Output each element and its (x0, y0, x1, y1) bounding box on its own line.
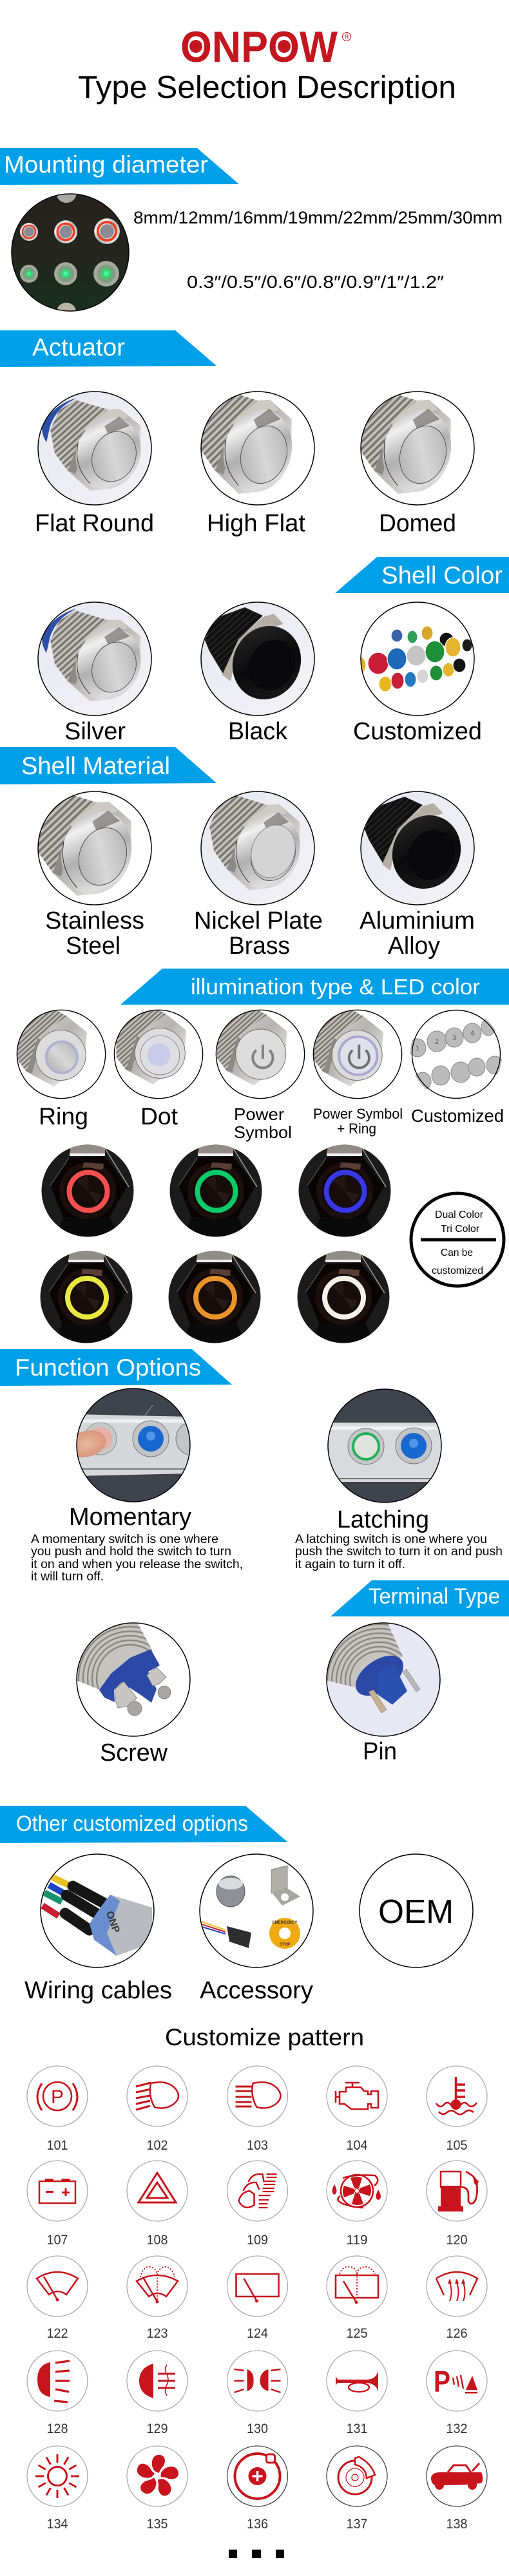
icon: 101 parking brake: 101 (46, 2138, 68, 2153)
photo: customized illumination symbols: 2 (435, 1038, 439, 1046)
photo: customized illumination symbols: 3 (452, 1034, 456, 1042)
icon: 122 wiper (27, 2256, 88, 2341)
photo: blue LED (299, 1145, 390, 1236)
photo: white LED (298, 1251, 389, 1343)
label: black: Black (228, 718, 288, 745)
label: power symbol: Symbol (234, 1122, 292, 1142)
label: power symbol plus ring (313, 1106, 403, 1137)
photo: lit switches of several diameters (11, 193, 130, 312)
photo: pin terminal (323, 1620, 440, 1738)
photo: momentary press (76, 1388, 191, 1502)
photo: customized illumination symbols: 4 (470, 1030, 474, 1037)
label: power symbol (234, 1104, 292, 1142)
photo: customized illumination symbols: 1 (416, 1045, 419, 1052)
icon: 130 front rear fog: 130 (247, 2421, 268, 2436)
label: stainless steel: Steel (66, 933, 120, 960)
icon: 136 brake pad: 136 (247, 2517, 268, 2532)
icon: 109 multi lamp (227, 2161, 287, 2248)
icon: 132 parking sensor: P (434, 2365, 450, 2398)
icon: 108 hazard triangle: 108 (147, 2233, 168, 2248)
heading: illumination type: illumination type & LED color (191, 975, 480, 999)
label: latching: Latching (337, 1506, 429, 1533)
icon: 103 low beam: 103 (247, 2138, 268, 2153)
photo: wiring cables (41, 1854, 154, 1967)
label: screw: Screw (100, 1739, 168, 1766)
text: momentary description: it on and when you release the switch, (31, 1558, 243, 1571)
icon: 104 engine (327, 2066, 387, 2153)
photo: customized colored shells (351, 602, 474, 715)
panel: illumination type and LED color (17, 969, 509, 1349)
heading: other customized options (0, 1806, 287, 1843)
icon: 109 multi lamp: 109 (247, 2233, 268, 2248)
icon: 128 headlamp (27, 2351, 88, 2436)
callout: dual and tri color: Can be (441, 1247, 473, 1258)
photo: customized illumination symbols (409, 1009, 503, 1100)
icon: 135 fan: 135 (147, 2517, 168, 2532)
icon: 101 parking brake (27, 2066, 88, 2153)
panel: terminal type (74, 1580, 509, 1766)
photo: green LED (170, 1145, 262, 1236)
photo: red LED (41, 1145, 134, 1236)
icon: 120 fuel pump (427, 2161, 487, 2248)
icon: 125 rear washer: 125 (347, 2326, 367, 2341)
icon: 123 wiper washer (127, 2256, 187, 2341)
photo: latching switches (327, 1388, 443, 1504)
panel: other customized options (0, 1806, 473, 2004)
photo: power symbol illumination (216, 1009, 305, 1099)
icon: 134 sun (27, 2446, 88, 2532)
icon: 105 coolant temperature: 105 (446, 2138, 468, 2153)
text: momentary description (31, 1533, 243, 1584)
photo: accessories (200, 1854, 313, 1967)
icon: 134 sun: 134 (46, 2517, 68, 2532)
heading: actuator: Actuator (32, 334, 125, 361)
icon: 132 parking sensor: 132 (446, 2421, 468, 2436)
callout: dual and tri color: Dual Color (435, 1209, 484, 1220)
badge: OEM (360, 1854, 473, 1967)
label: ring: Ring (39, 1103, 88, 1130)
label: domed: Domed (379, 510, 456, 537)
label: nickel plate brass: Brass (229, 933, 290, 960)
panel: pattern icon grid (27, 2066, 487, 2532)
text: momentary description: A momentary switch is one where (31, 1533, 218, 1546)
icon: 124 rear wiper (227, 2256, 287, 2341)
icon: 126 defrost (427, 2256, 487, 2341)
callout: dual and tri color (411, 1193, 504, 1286)
heading: illumination type (120, 969, 509, 1005)
heading: other customized options: Other customized options (16, 1812, 248, 1836)
label: aluminium alloy (360, 907, 475, 960)
heading: shell color: Shell Color (381, 562, 503, 589)
label: nickel plate brass (194, 907, 323, 960)
icon: 130 front rear fog (227, 2351, 287, 2436)
icon: 129 fog lamp (127, 2351, 187, 2436)
label: stainless steel (45, 907, 144, 960)
label: flat round: Flat Round (35, 510, 154, 537)
photo: screw terminal (74, 1620, 190, 1736)
icon: 105 coolant temperature (427, 2066, 487, 2153)
icon: 126 defrost: 126 (446, 2326, 468, 2341)
label: customized: Customized (353, 718, 482, 745)
photo: domed (356, 390, 474, 505)
callout: dual and tri color: customized (432, 1265, 483, 1276)
photo: high flat (197, 390, 314, 505)
icon: 120 fuel pump: 120 (446, 2233, 468, 2248)
label: pin: Pin (363, 1738, 397, 1765)
heading: actuator (0, 330, 216, 367)
icon: 124 rear wiper: 124 (247, 2326, 268, 2341)
label: high flat: High Flat (207, 510, 305, 537)
text: latching description: push the switch to turn it on and push (295, 1545, 503, 1558)
icon: 119 cooling fan: 119 (347, 2233, 367, 2248)
heading: function options (0, 1349, 232, 1386)
callout: dual and tri color: Tri Color (441, 1224, 480, 1235)
label: accessory: Accessory (200, 1977, 313, 2004)
label: nickel plate brass: Nickel Plate (194, 907, 323, 934)
icon: 123 wiper washer: 123 (147, 2326, 168, 2341)
label: aluminium alloy: Alloy (388, 933, 440, 960)
label: silver: Silver (64, 718, 126, 745)
heading: shell material: Shell Material (21, 753, 170, 780)
icon: 103 low beam (227, 2066, 287, 2153)
sizes in millimetres: 8mm/12mm/16mm/19mm/22mm/25mm/30mm (133, 208, 503, 227)
heading: shell material (0, 747, 216, 784)
icon: 137 brake disc (327, 2446, 387, 2532)
icon: 104 engine: 104 (347, 2138, 368, 2153)
heading: terminal type: Terminal Type (369, 1584, 500, 1609)
heading: shell color (335, 557, 509, 593)
icon: 135 fan (127, 2446, 187, 2532)
label: power symbol plus ring: + Ring (337, 1121, 376, 1137)
icon: 102 high beam (127, 2066, 187, 2153)
icon: 136 brake pad (227, 2446, 287, 2532)
panel: shell color (38, 557, 509, 745)
label: aluminium alloy: Aluminium (360, 907, 475, 934)
icon: 122 wiper: 122 (46, 2326, 68, 2341)
continuation dots (229, 2550, 284, 2558)
label: power symbol plus ring: Power Symbol (313, 1106, 403, 1122)
photo: dot illumination (114, 1008, 203, 1099)
photo: aluminium alloy (361, 791, 474, 905)
title: Type Selection Description (78, 70, 456, 105)
photo: ring illumination (17, 1010, 106, 1099)
heading: terminal type (331, 1580, 509, 1616)
photo: nickel plate brass (201, 791, 314, 905)
heading: function options: Function Options (15, 1354, 201, 1381)
icon: 107 battery: 107 (46, 2233, 68, 2248)
badge: OEM: OEM (378, 1893, 454, 1931)
photo: black shell (201, 602, 314, 715)
label: momentary: Momentary (69, 1504, 191, 1531)
text: momentary description: it will turn off. (31, 1570, 104, 1584)
text: latching description: A latching switch is one where you (295, 1533, 487, 1546)
photo: accessories: STOP (280, 1943, 290, 1947)
photo: silver shell (38, 602, 152, 715)
icon: 119 cooling fan (327, 2161, 387, 2248)
photo: stainless steel (34, 791, 151, 906)
label: customized: Customized (411, 1106, 504, 1126)
text: momentary description: you push and hold the switch to turn (31, 1545, 231, 1558)
text: latching description (295, 1533, 503, 1571)
icon: 128 headlamp: 128 (46, 2421, 68, 2436)
icon: 107 battery (27, 2161, 88, 2248)
icon: 125 rear washer (327, 2256, 387, 2341)
icon: 137 brake disc: 137 (347, 2517, 367, 2532)
icon: 101 parking brake: P (51, 2087, 64, 2108)
panel: function options (0, 1349, 503, 1584)
icon: 132 parking sensor (427, 2351, 487, 2436)
panel: shell material (0, 747, 475, 960)
icon: 129 fog lamp: 129 (147, 2421, 168, 2436)
photo: wiring cables: ONP (104, 1909, 122, 1935)
heading: mounting diameter (0, 148, 239, 185)
icon: 138 car trunk: 138 (446, 2517, 468, 2532)
heading: customize pattern: Customize pattern (165, 2024, 364, 2050)
logo: ONPOW: R (345, 33, 349, 40)
label: power symbol: Power (234, 1104, 284, 1124)
panel: mounting diameter (0, 148, 503, 321)
heading: mounting diameter: Mounting diameter (4, 151, 208, 178)
label: wiring cables: Wiring cables (24, 1977, 172, 2004)
photo: power symbol plus ring (313, 1010, 402, 1099)
logo: ONPOW: ONPOW (180, 23, 338, 71)
sizes in inches: 0.3″/0.5″/0.6″/0.8″/0.9″/1″/1.2″ (187, 272, 444, 292)
icon: 131 horn: 131 (347, 2421, 367, 2436)
photo: accessories: EMERGENCY (273, 1921, 297, 1925)
photo: orange LED (169, 1251, 260, 1343)
icon: 102 high beam: 102 (147, 2138, 168, 2153)
label: dot: Dot (140, 1103, 178, 1130)
label: stainless steel: Stainless (45, 907, 144, 934)
photo: flat round (38, 392, 152, 505)
panel: actuator (0, 330, 474, 537)
icon: 108 hazard triangle (127, 2161, 187, 2248)
photo: yellow LED (40, 1251, 133, 1343)
icon: 138 car trunk (427, 2446, 487, 2532)
icon: 131 horn (327, 2351, 387, 2436)
text: latching description: it again to turn it off. (295, 1558, 405, 1571)
